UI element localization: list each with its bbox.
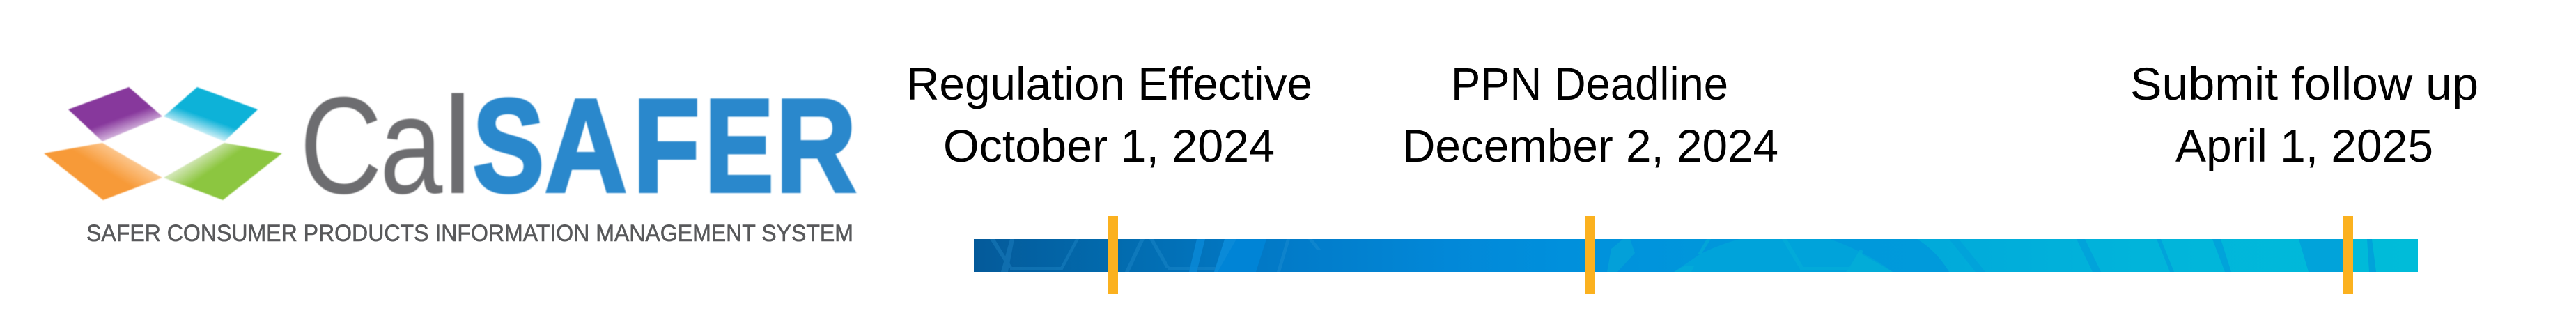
middle lighter shapes — [1607, 239, 1635, 272]
logo: CalSAFER — [44, 68, 856, 247]
logo wordmark: SAFER — [472, 71, 856, 220]
milestone label: PPN Deadline — [1402, 58, 1778, 171]
milestone label: Submit follow up: April 1, 2025 — [2175, 120, 2433, 171]
milestone label: Regulation Effective — [906, 58, 1312, 171]
tick: PPN Deadline — [1585, 216, 1595, 294]
left pale streaks — [990, 239, 1321, 272]
tick: Submit follow up — [2343, 216, 2353, 294]
right lighter field — [1917, 239, 2418, 272]
logo wordmark: SAFER: E — [705, 72, 773, 220]
logo wordmark: Cal — [300, 68, 473, 223]
logo wordmark: Cal: l — [442, 68, 473, 222]
logo wordmark: Cal: C — [300, 68, 382, 222]
milestone label: Regulation Effective: October 1, 2024 — [943, 120, 1275, 171]
milestone label: PPN Deadline: December 2, 2024 — [1402, 120, 1778, 171]
milestone label: PPN Deadline: PPN Deadline — [1451, 58, 1728, 109]
milestone label: Regulation Effective: Regulation Effective — [906, 58, 1312, 109]
logo wordmark: SAFER: R — [776, 72, 856, 220]
logo wordmark: Cal: a — [380, 69, 443, 223]
milestone label: Submit follow up: Submit follow up — [2130, 58, 2478, 109]
tick: Regulation Effective — [1108, 216, 1118, 294]
logo wordmark: SAFER: A — [545, 72, 627, 220]
logo tagline: SAFER CONSUMER PRODUCTS INFORMATION MANAGEMENT SYSTEM — [86, 220, 853, 247]
timeline bar — [974, 239, 2418, 272]
milestone label: Submit follow up — [2130, 58, 2478, 171]
icon: four-colour open box mark — [44, 87, 282, 200]
logo wordmark: SAFER: S — [472, 71, 544, 220]
logo wordmark: SAFER: F — [633, 71, 700, 220]
